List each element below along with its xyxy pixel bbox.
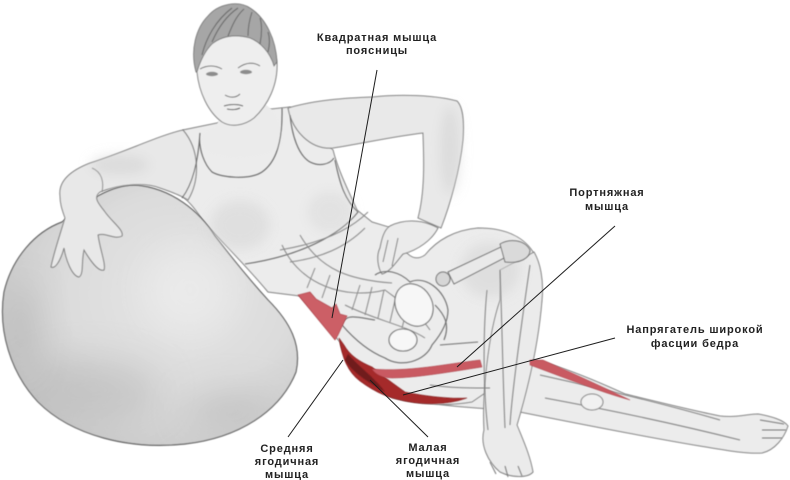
label: gluteus minimus: ягодичная [396,455,460,467]
torso shading [90,105,520,298]
muscle: quadratus lumborum [298,292,347,340]
straight leg [395,356,788,453]
neck [201,100,283,158]
tank top [182,108,358,264]
pelvis [342,271,478,363]
label: gluteus minimus: Малая [408,442,448,454]
fitness ball [2,185,298,445]
figure body behind the ball [176,107,788,476]
hand on hip [378,221,438,274]
femur and knee [436,241,530,286]
spine [280,212,430,338]
label: tensor fasciae latae: фасции бедра [651,338,739,350]
label: quadratus lumborum: поясницы [346,45,408,57]
pointer lines [288,70,615,437]
label: gluteus medius: ягодичная [255,456,319,468]
face [197,18,277,125]
muscle: sartorius and tensor band [372,360,630,400]
raised arm [288,95,463,228]
torso and hips [176,107,542,404]
bent leg shin and foot [483,252,543,476]
label: tensor fasciae latae: Напрягатель широкой [626,324,764,336]
muscle: gluteus [339,338,467,404]
label: gluteus minimus: мышца [406,468,450,480]
label: sartorius: мышца [585,201,629,213]
label: gluteus medius: Средняя [260,443,314,455]
shin bones [430,265,740,440]
toes [490,420,786,477]
resting arm and hand [51,130,196,277]
label: sartorius: Портняжная [569,187,645,199]
wrist crease [92,168,103,192]
facial features [200,63,260,110]
label: quadratus lumborum: Квадратная мышца [317,32,437,44]
hair [194,4,277,72]
muscle: gluteus dark overlap [345,354,385,392]
